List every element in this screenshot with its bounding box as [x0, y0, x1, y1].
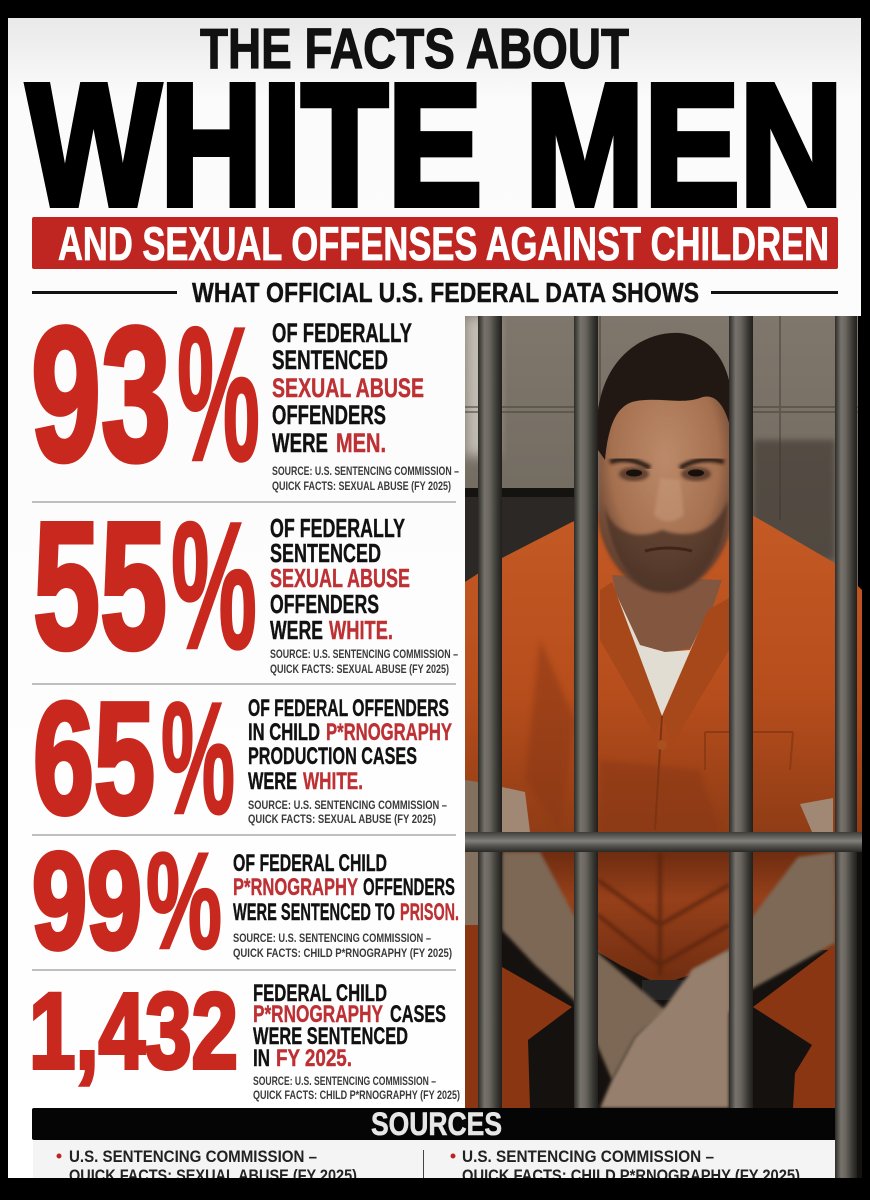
stat 5: 1,432 cases — [29, 970, 460, 1102]
stat 1: 93 percent: OF FEDERALLY — [272, 318, 412, 348]
stat 4: 99 percent: % — [146, 825, 222, 978]
neck — [612, 575, 722, 655]
stat 4: 99 percent: OFFENDERS — [363, 874, 455, 901]
stat 5: 1,432 cases: IN — [253, 1045, 270, 1072]
stat 4: 99 percent: OF FEDERAL CHILD — [233, 850, 387, 877]
trousers centre — [502, 852, 835, 985]
stat 4: 99 percent — [32, 825, 459, 978]
stat 5: 1,432 cases: QUICK FACTS: CHILD P*RNOGRAPHY (FY 2025) — [253, 1090, 460, 1102]
stat 1: 93 percent: SEXUAL ABUSE — [272, 373, 424, 403]
stat 5: 1,432 cases: 1,432 — [29, 970, 238, 1091]
sources panel: U.S. SENTENCING COMMISSION – — [69, 1147, 317, 1166]
stat 5: 1,432 cases: FEDERAL CHILD — [253, 980, 387, 1007]
shirt shadows — [526, 644, 706, 802]
stat 3: 65 percent: SOURCE: U.S. SENTENCING COMMISSION – — [248, 800, 447, 812]
stat 2: 55 percent: 55 — [33, 485, 167, 687]
left forearm — [502, 852, 665, 1080]
stat 4: 99 percent: WERE SENTENCED TO — [233, 899, 395, 926]
stat 4: 99 percent: P*RNOGRAPHY — [233, 874, 358, 901]
sources panel: QUICK FACTS: SEXUAL ABUSE (FY 2025) — [69, 1166, 357, 1185]
eyes and brows — [610, 460, 724, 481]
stat 3: 65 percent: OF FEDERAL OFFENDERS — [248, 695, 449, 722]
seat gap — [642, 980, 684, 1000]
stat 2: 55 percent: SOURCE: U.S. SENTENCING COMMISSION – — [270, 649, 458, 661]
stat 5: 1,432 cases: FY 2025. — [276, 1045, 352, 1072]
left edge arm — [465, 780, 478, 925]
stat 5: 1,432 cases: P*RNOGRAPHY — [253, 1001, 383, 1028]
stat 4: 99 percent: QUICK FACTS: CHILD P*RNOGRAPHY (FY 2025) — [233, 948, 452, 960]
stat 3: 65 percent: P*RNOGRAPHY — [326, 719, 452, 746]
stat 2: 55 percent — [33, 485, 458, 687]
stat 3: 65 percent: WERE — [248, 768, 297, 795]
stat 4: 99 percent: PRISON. — [400, 899, 459, 926]
stat 1: 93 percent: 93 — [31, 288, 171, 501]
stat 4: 99 percent: SOURCE: U.S. SENTENCING COMMISSION – — [233, 933, 431, 945]
stat 3: 65 percent: QUICK FACTS: SEXUAL ABUSE (FY 2025) — [248, 814, 436, 826]
bottom black frame — [0, 1178, 870, 1200]
stat 5: 1,432 cases: CASES — [390, 1001, 446, 1028]
stat 3: 65 percent: IN CHILD — [248, 719, 320, 746]
beard — [604, 500, 728, 592]
stat 3: 65 percent: 65 — [33, 669, 155, 847]
sleeve skin — [502, 787, 833, 832]
stat 3: 65 percent — [33, 669, 452, 847]
hand — [600, 950, 729, 1108]
stat 2: 55 percent: OF FEDERALLY — [270, 513, 405, 543]
stat 1: 93 percent: SOURCE: U.S. SENTENCING COMMISSION – — [272, 466, 459, 478]
stat 1: 93 percent — [31, 288, 459, 501]
sources panel: QUICK FACTS: CHILD P*RNOGRAPHY (FY 2025) — [462, 1166, 800, 1185]
stat 4: 99 percent: 99 — [32, 825, 142, 978]
stat 2: 55 percent: QUICK FACTS: SEXUAL ABUSE (FY 2025) — [270, 664, 449, 676]
head — [598, 396, 729, 593]
stat 2: 55 percent: SEXUAL ABUSE — [270, 563, 410, 593]
stat 5: 1,432 cases: WERE SENTENCED — [253, 1023, 408, 1050]
stat 3: 65 percent: PRODUCTION CASES — [248, 743, 417, 770]
collar — [600, 582, 729, 722]
stat 2: 55 percent: WERE — [270, 615, 323, 645]
sources panel — [32, 1106, 835, 1185]
stat 1: 93 percent: SENTENCED — [272, 345, 388, 375]
undershirt — [616, 595, 700, 716]
stat 1: 93 percent: WERE — [272, 428, 328, 458]
stat 2: 55 percent: OFFENDERS — [270, 589, 379, 619]
right trouser leg — [753, 945, 835, 1108]
stat 2: 55 percent: % — [171, 485, 257, 687]
title: the facts about: THE FACTS ABOUT — [200, 17, 629, 81]
stat 2: 55 percent: WHITE. — [329, 615, 393, 645]
stat 1: 93 percent: MEN. — [336, 428, 386, 458]
photo: prisoner behind bars — [465, 316, 870, 1180]
stat dividers — [32, 502, 456, 970]
subheading: WHAT OFFICIAL U.S. FEDERAL DATA SHOWS — [192, 277, 699, 308]
shirt — [465, 510, 862, 852]
title: white men — [27, 48, 843, 242]
stat 1: 93 percent: % — [177, 288, 260, 501]
trouser folds — [598, 852, 729, 975]
left trouser leg — [465, 925, 572, 1108]
stat 2: 55 percent: SENTENCED — [270, 538, 381, 568]
bars — [465, 316, 862, 1178]
sources panel: SOURCES — [371, 1106, 502, 1142]
right forearm — [691, 852, 835, 1014]
stat 1: 93 percent: OFFENDERS — [272, 400, 386, 430]
stat 1: 93 percent: QUICK FACTS: SEXUAL ABUSE (FY 2025) — [272, 481, 451, 493]
placket and pocket — [655, 716, 793, 830]
nose and mouth — [645, 478, 692, 551]
stat 3: 65 percent: % — [161, 669, 235, 847]
sources panel: U.S. SENTENCING COMMISSION – — [462, 1147, 714, 1166]
hair — [597, 333, 732, 460]
stat 3: 65 percent: WHITE. — [303, 768, 363, 795]
stat 5: 1,432 cases: SOURCE: U.S. SENTENCING COMMISSION – — [253, 1076, 436, 1088]
title: white men: WHITE — [27, 48, 482, 242]
